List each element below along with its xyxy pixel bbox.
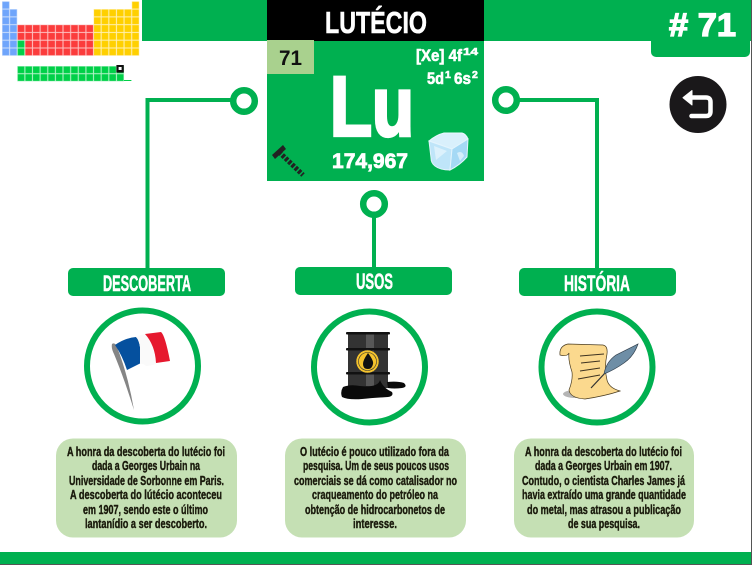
top green banner — [142, 0, 751, 41]
text panel: usos: craqueamento do petróleo na — [312, 488, 439, 502]
text panel: descoberta: A honra da descoberta do lutécio foi — [67, 445, 225, 459]
text panel: historia: A honra da descoberta do lutécio foi — [525, 445, 682, 459]
electron configuration: [Xe] 4f — [416, 47, 462, 65]
electron configuration: 14 — [463, 46, 478, 58]
text panel: historia — [514, 438, 694, 538]
text panel: historia: Contudo, o cientista Charles James já — [522, 474, 685, 488]
atomic number: 71 — [279, 47, 302, 70]
element number tab: # 71 — [669, 7, 736, 43]
text panel: descoberta: lantanídio a ser descoberto. — [85, 517, 207, 531]
element number tab — [651, 0, 751, 57]
text panel: usos: interesse. — [353, 517, 397, 531]
text panel: historia: do metal, mas atrasou a publicação — [527, 503, 681, 517]
scroll shadow — [563, 390, 589, 398]
icon circle: french flag — [87, 310, 198, 422]
text panel: usos: O lutécio é pouco utilizado fora da — [300, 445, 450, 459]
text panel: descoberta: em 1907, sendo este o último — [83, 503, 208, 517]
text panel: usos: pesquisa. Um de seus poucos usos — [303, 459, 449, 473]
icon circle: oil barrel — [314, 312, 425, 422]
flag cloth — [115, 332, 170, 370]
back button — [670, 76, 726, 133]
heading: historia — [519, 268, 676, 296]
connector: descoberta — [148, 90, 255, 270]
icon: ice cube — [429, 133, 468, 170]
scroll lines — [578, 354, 604, 379]
heading: usos — [295, 267, 452, 295]
electron configuration: 1 — [445, 69, 451, 81]
element name header — [267, 0, 484, 41]
text panel: historia: dada a Georges Urbain em 1907. — [535, 459, 672, 473]
element name header: LUTÉCIO — [325, 5, 427, 40]
text panel: descoberta: Universidade de Sorbonne em Paris. — [69, 474, 224, 488]
text panel: descoberta: A descoberta do lútécio aconteceu — [70, 488, 222, 502]
periodic table locator — [2, 1, 139, 81]
flag pole — [112, 343, 134, 410]
icon: screw — [272, 145, 303, 175]
bottom green bar — [0, 552, 751, 564]
text panel: usos — [285, 438, 466, 538]
text panel: usos: comerciais se dá como catalisador no — [294, 474, 457, 488]
atomic number — [267, 40, 314, 74]
text panel: descoberta — [56, 438, 237, 538]
element card — [267, 0, 484, 181]
oil label — [356, 350, 379, 373]
electron configuration: 5d — [427, 70, 444, 88]
barrel body — [346, 332, 390, 388]
heading: usos: USOS — [356, 269, 393, 294]
text panel: historia: de sua pesquisa. — [568, 517, 640, 531]
electron configuration: 2 — [472, 69, 478, 81]
text panel: historia: havia extraído uma grande quantidade — [522, 488, 686, 502]
quill — [591, 344, 638, 388]
text panel: usos: obtenção de hidrocarbonetos de — [305, 503, 445, 517]
atomic mass: 174,967 — [332, 150, 408, 173]
electron configuration: 6s — [454, 70, 471, 88]
heading: historia: HISTÓRIA — [564, 271, 630, 296]
element symbol: Lu — [330, 60, 414, 154]
heading: descoberta — [68, 268, 225, 296]
connector: usos — [363, 193, 385, 269]
oil puddle — [341, 380, 406, 399]
text panel: descoberta: dada a Georges Urbain na — [92, 459, 201, 473]
heading: descoberta: DESCOBERTA — [103, 271, 191, 296]
scroll paper — [560, 344, 620, 399]
electron configuration — [416, 46, 478, 88]
icon circle: scroll and quill — [542, 312, 652, 422]
connector: historia — [495, 89, 597, 270]
